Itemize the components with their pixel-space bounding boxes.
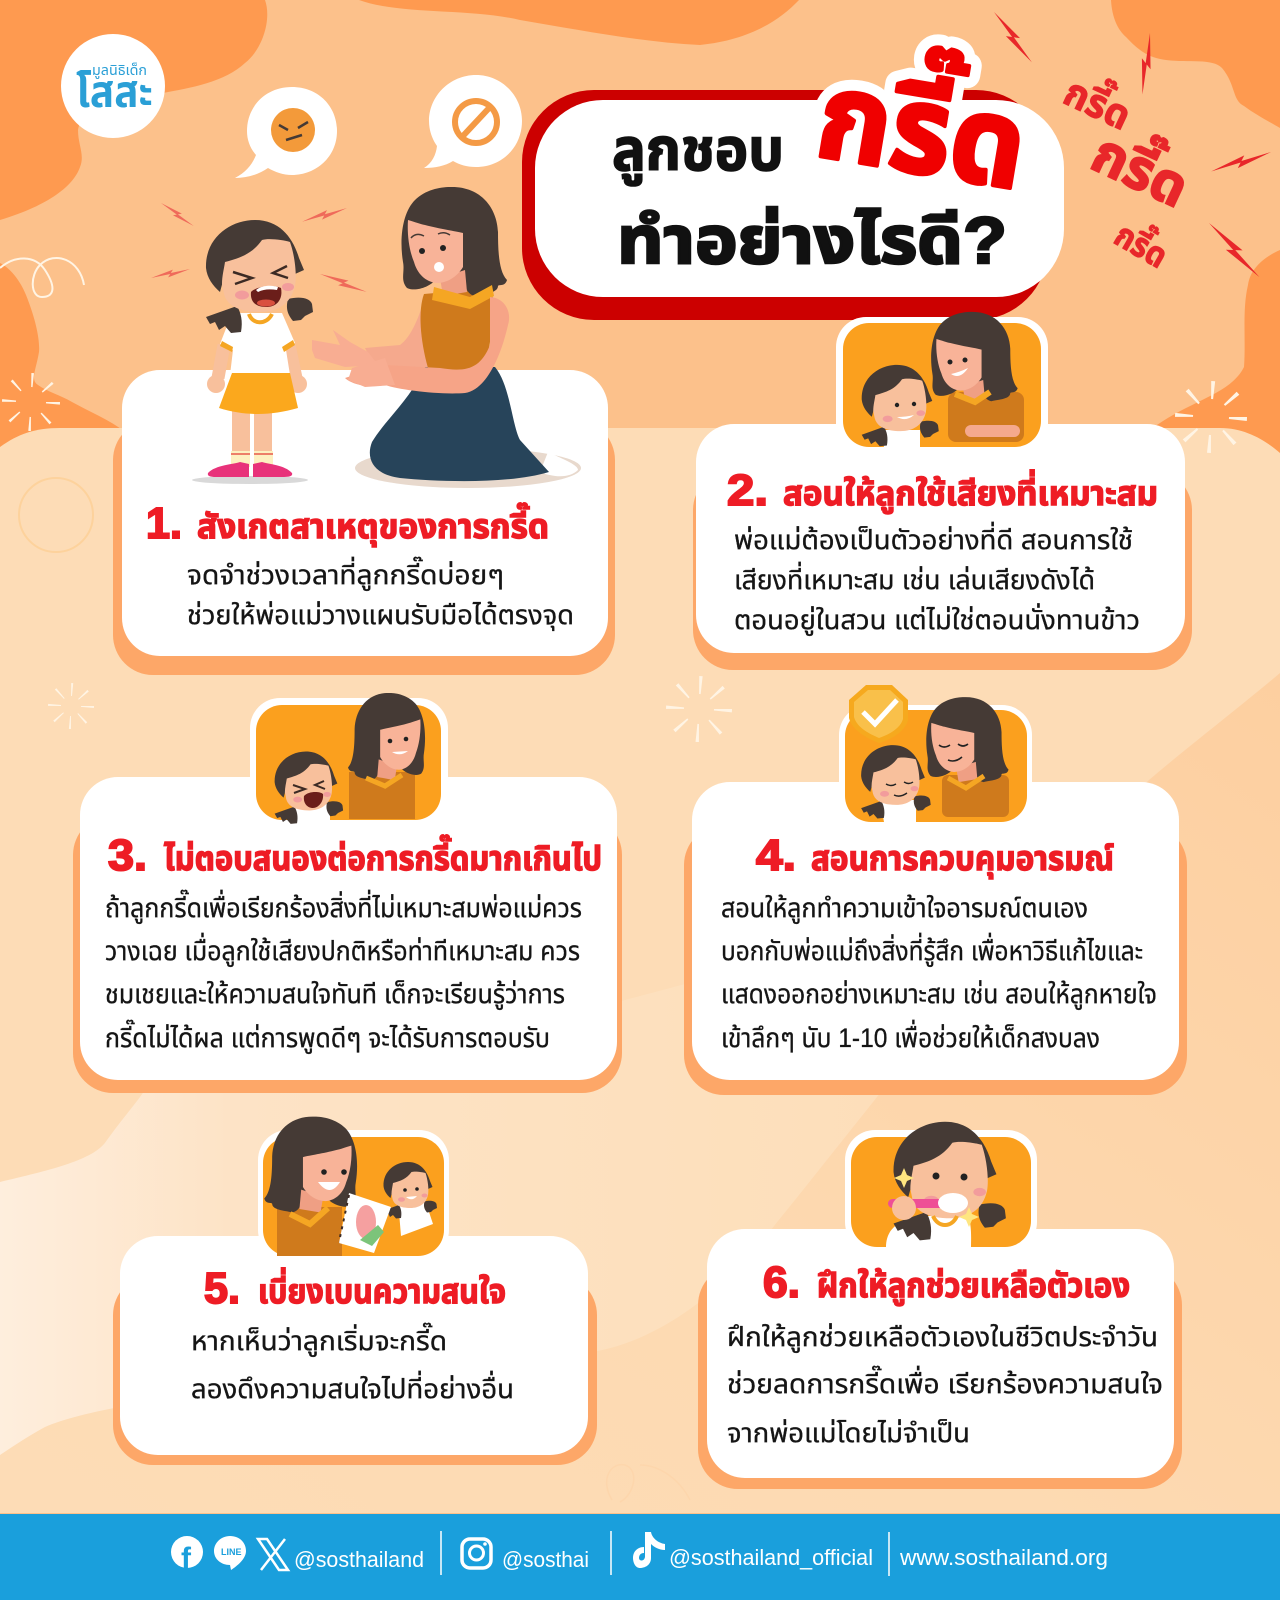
icon: instagram	[462, 1539, 491, 1568]
step 6 text: ช่วยลดการกรี๊ดเพื่อ เรียกร้องความสนใจ	[727, 1365, 1163, 1399]
illustration: kneeling mother	[312, 187, 581, 488]
step 2 text: เสียงที่เหมาะสม เช่น เล่นเสียงดังได้	[734, 561, 1095, 595]
step 6 text	[727, 1322, 1163, 1448]
step 5 text	[191, 1322, 514, 1404]
illustration: crying girl	[192, 220, 313, 484]
footer bar: @sosthailand	[294, 1547, 424, 1572]
step 5 text: ลองดึงความสนใจไปที่อย่างอื่น	[191, 1370, 514, 1404]
step 4 illustration	[839, 685, 1032, 827]
icon: tiktok	[633, 1532, 665, 1568]
icon: line: LINE	[221, 1547, 242, 1557]
step 3 text: ชมเชยและให้ความสนใจทันที เด็กจะเรียนรู้ว่าการ	[105, 979, 565, 1010]
step 1 heading: สังเกตสาเหตุของการกรี๊ด	[197, 502, 549, 547]
panel: step 1	[113, 370, 615, 675]
step 4 text: แสดงออกอย่างเหมาะสม เช่น สอนให้ลูกหายใจ	[721, 979, 1157, 1010]
step 4 text: สอนให้ลูกทำความเข้าใจอารมณ์ตนเอง	[721, 893, 1088, 924]
step 5 text: หากเห็นว่าลูกเริ่มจะกรี๊ด	[191, 1322, 447, 1357]
icon: x	[258, 1539, 288, 1570]
title banner	[522, 29, 1064, 320]
step 2 text	[734, 521, 1140, 636]
title banner: กรี๊ด	[809, 29, 1039, 215]
step 2 illustration	[836, 312, 1048, 454]
logo	[61, 34, 165, 138]
step 3 illustration	[250, 693, 448, 824]
step 5 heading: 5.	[204, 1264, 240, 1313]
scream words and bolts: กรี๊ด	[1083, 113, 1202, 219]
panel: step 4	[684, 685, 1187, 1095]
step 1 heading	[146, 499, 549, 548]
step 3 text: วางเฉย เมื่อลูกใช้เสียงปกติหรือท่าทีเหมาะสม ควร	[105, 932, 580, 967]
footer bar	[0, 1514, 1280, 1600]
step 1 text	[187, 556, 574, 631]
speech bubble: prohibition sign	[424, 75, 522, 168]
panel: step 2	[693, 312, 1192, 670]
step 6 text: จากพ่อแม่โดยไม่จำเป็น	[727, 1418, 970, 1448]
icon: facebook: f	[181, 1542, 192, 1575]
step 3 text	[105, 889, 582, 1054]
speech bubble: angry face	[235, 87, 337, 178]
step 6 text: ฝึกให้ลูกช่วยเหลือตัวเองในชีวิตประจำวัน	[727, 1322, 1158, 1353]
logo: โสสะ	[76, 68, 153, 117]
footer bar: @sosthailand_official	[669, 1545, 873, 1570]
step 3 heading: 3.	[108, 831, 147, 880]
scream words and bolts: กรี๊ด	[1057, 64, 1140, 139]
step 6 heading: ฝึกให้ลูกช่วยเหลือตัวเอง	[817, 1267, 1130, 1306]
step 2 heading: 2.	[727, 466, 768, 515]
step 1 heading: 1.	[146, 499, 182, 548]
title banner: กรี๊ด	[809, 29, 1039, 215]
panel: step 6	[698, 1122, 1182, 1489]
step 4 heading: สอนการควบคุมอารมณ์	[811, 840, 1114, 879]
step 2 heading: สอนให้ลูกใช้เสียงที่เหมาะสม	[783, 469, 1158, 514]
step 5 heading	[204, 1264, 506, 1313]
step 2 text: ตอนอยู่ในสวน แต่ไม่ใช่ตอนนั่งทานข้าว	[734, 603, 1140, 636]
panel: step 5	[113, 1117, 597, 1465]
icon: facebook	[171, 1536, 203, 1575]
panel: step 3	[73, 693, 622, 1093]
step 4 text: บอกกับพ่อแม่ถึงสิ่งที่รู้สึก เพื่อหาวิธีแก้ไขและ	[721, 932, 1143, 967]
footer bar: @sosthai	[502, 1547, 589, 1572]
footer bar: www.sosthailand.org	[899, 1545, 1108, 1570]
step 1 text: ช่วยให้พ่อแม่วางแผนรับมือได้ตรงจุด	[187, 600, 574, 631]
lightning bolts around the girl	[150, 200, 368, 296]
step 6 heading: 6.	[763, 1258, 800, 1307]
step 4 text	[721, 893, 1157, 1053]
step 4 heading	[756, 831, 1114, 880]
step 4 heading: 4.	[756, 831, 796, 880]
step 6 illustration	[845, 1122, 1037, 1252]
title banner: ลูกชอบ	[612, 116, 784, 186]
step 3 text: ถ้าลูกกรี๊ดเพื่อเรียกร้องสิ่งที่ไม่เหมาะสมพ่อแม่ควร	[105, 889, 582, 924]
step 4 text: เข้าลึกๆ นับ 1-10 เพื่อช่วยให้เด็กสงบลง	[721, 1019, 1100, 1053]
logo: มูลนิธิเด็ก	[92, 62, 147, 79]
scream words and bolts: กรี๊ด	[1108, 211, 1177, 276]
step 3 heading	[108, 831, 602, 880]
step 5 heading: เบี่ยงเบนความสนใจ	[258, 1267, 506, 1311]
step 1 text: จดจำช่วงเวลาที่ลูกกรี๊ดบ่อยๆ	[187, 556, 504, 591]
step 2 text: พ่อแม่ต้องเป็นตัวอย่างที่ดี สอนการใช้	[734, 521, 1133, 555]
scream words and bolts	[990, 9, 1273, 281]
step 6 heading	[763, 1258, 1130, 1307]
step 3 heading: ไม่ตอบสนองต่อการกรี๊ดมากเกินไป	[164, 834, 602, 878]
step 2 heading	[727, 466, 1158, 515]
step 3 text: กรี๊ดไม่ได้ผล แต่การพูดดีๆ จะได้รับการตอบรับ	[105, 1019, 550, 1054]
step 5 illustration	[258, 1117, 449, 1260]
icon: line	[214, 1536, 246, 1570]
title banner: ทำอย่างไรดี?	[617, 203, 1007, 277]
